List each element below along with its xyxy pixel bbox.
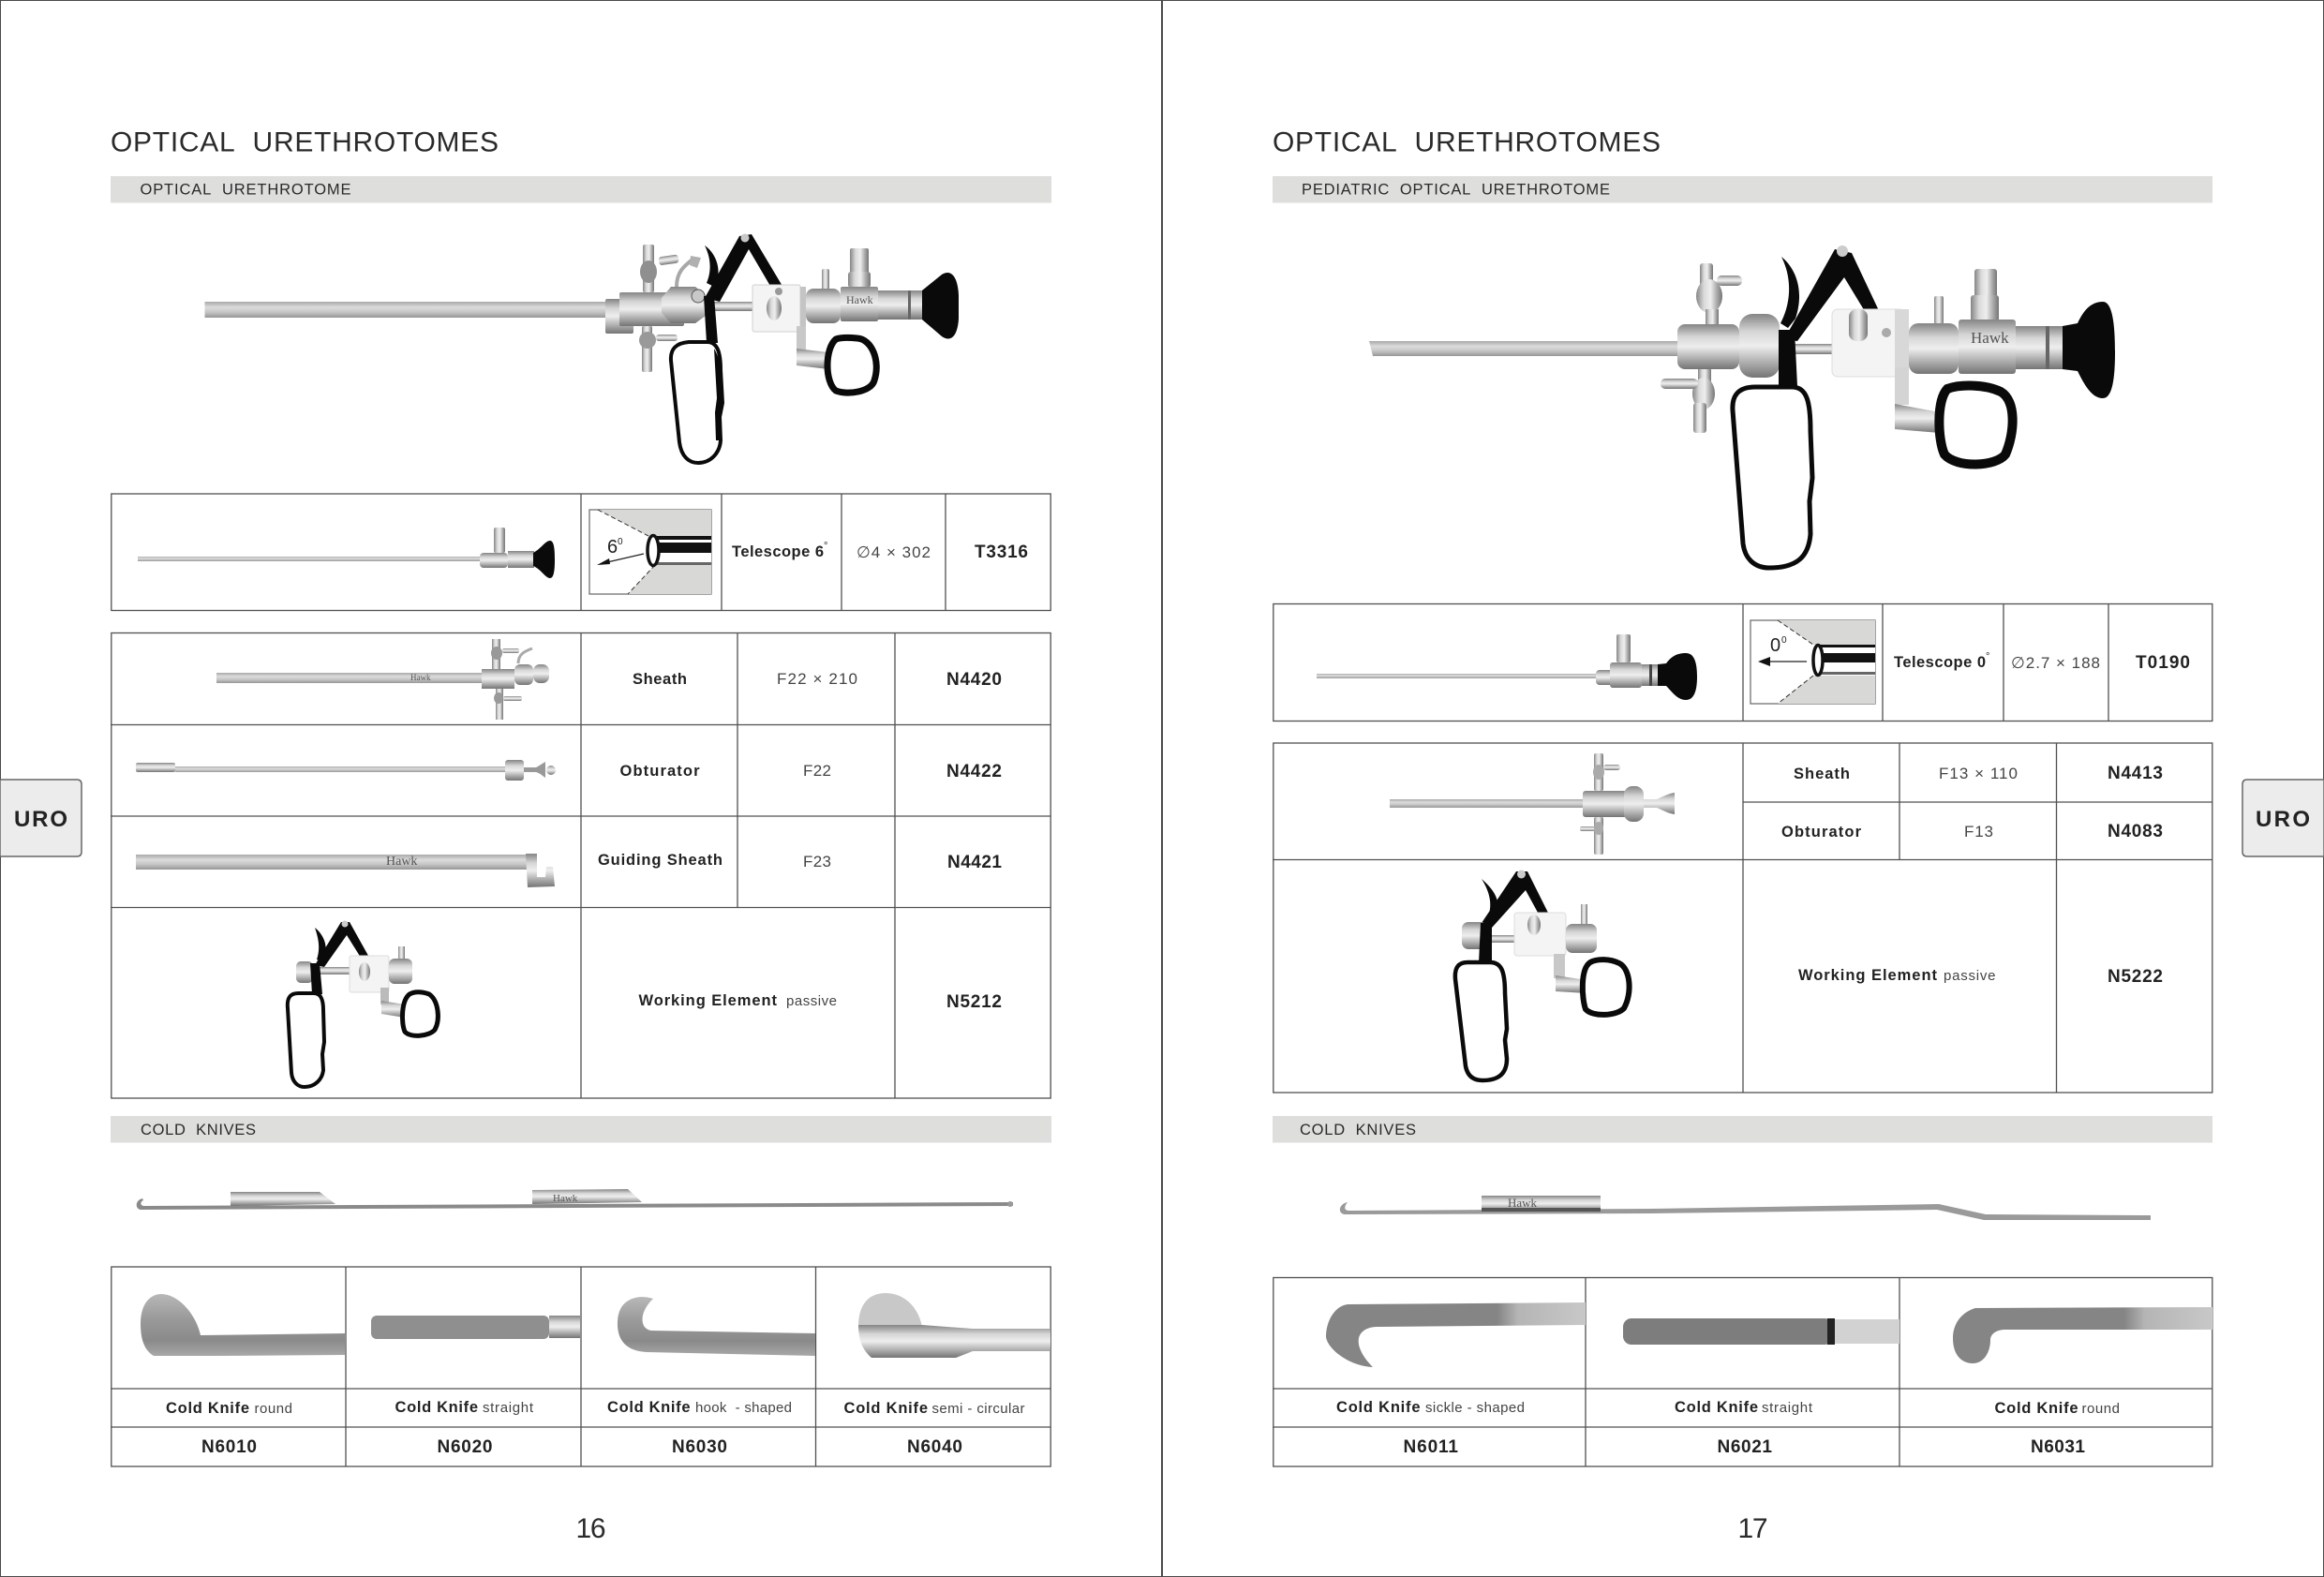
code: N6031: N6031 — [2031, 1437, 2085, 1457]
product image: sheath — [216, 639, 549, 720]
page number 16: 16 — [575, 1513, 605, 1544]
tab: URO right: URO — [2256, 807, 2310, 832]
label: Cold Knife straight: straight — [1762, 1400, 1813, 1416]
label: Cold Knife straight — [395, 1399, 534, 1416]
table: cold knives — [111, 1267, 1050, 1466]
table: sheath, obturator, guiding sheath, working element — [111, 632, 1050, 1098]
section bar: cold knives: COLD KNIVES — [1300, 1122, 1416, 1138]
title: OPTICAL URETHROTOMES — [1273, 127, 1661, 157]
label: Cold Knife round: round — [255, 1401, 292, 1417]
section bar: cold knives: COLD KNIVES — [141, 1122, 256, 1138]
diagram: 0 degree view — [1750, 620, 1875, 704]
label: Cold Knife sickle-shaped — [1336, 1399, 1525, 1416]
knife: hook-shaped — [618, 1297, 815, 1356]
code: N5222: N5222 — [2108, 967, 2163, 987]
diagram: 6 degree view — [589, 510, 711, 594]
size: F13: F13 — [1964, 823, 1993, 841]
product image: cold knife — [1340, 1196, 2151, 1220]
label: Cold Knife straight: straight — [483, 1400, 534, 1416]
label: Working Element passive: passive — [786, 993, 837, 1009]
table: telescope — [112, 494, 1050, 611]
size: F22: F22 — [803, 762, 831, 780]
label: Cold Knife round — [166, 1400, 292, 1417]
product image: cold knife — [137, 1189, 1013, 1210]
cell: Telescope 6: ° — [824, 541, 827, 552]
product image: sheath and obturator — [1390, 753, 1675, 855]
code: N4422: N4422 — [946, 762, 1002, 781]
section bar: cold knives — [111, 1116, 1051, 1143]
label: Obturator: Obturator — [620, 763, 700, 780]
code: N6040: N6040 — [907, 1437, 962, 1457]
knife: round — [141, 1294, 345, 1356]
label: Cold Knife straight — [1675, 1399, 1813, 1416]
tab: URO left — [0, 780, 82, 856]
product image: cold knife: Hawk — [553, 1193, 578, 1204]
tab: URO right — [2242, 780, 2324, 856]
cell: Telescope 0: ° — [1986, 651, 1989, 662]
code: N5212: N5212 — [946, 992, 1002, 1012]
section bar: pediatric optical urethrotome — [1273, 176, 2212, 202]
code: N6011: N6011 — [1404, 1437, 1458, 1457]
product image: obturator — [136, 760, 556, 781]
product image: assembled pediatric urethrotome: Hawk — [1971, 329, 2009, 347]
code: N4083: N4083 — [2108, 822, 2163, 841]
product image: working element — [1455, 870, 1630, 1080]
label: Sheath: Sheath — [633, 671, 687, 688]
knife: semi-circular — [858, 1293, 1050, 1358]
knife: straight — [371, 1316, 580, 1339]
code: N6010: N6010 — [201, 1437, 257, 1457]
product image: assembled optical urethrotome — [204, 234, 959, 463]
size: F13 x 110: F13 × 110 — [1939, 765, 2018, 782]
label: Cold Knife sickle-shaped: Cold Knife — [1336, 1399, 1421, 1416]
label: Cold Knife hook-shaped: hook - shaped — [695, 1400, 792, 1416]
label: Cold Knife hook-shaped — [607, 1399, 792, 1416]
section bar: optical urethrotome: OPTICAL URETHROTOME — [141, 182, 350, 199]
label: Cold Knife semi-circular: Cold Knife — [843, 1400, 928, 1417]
knife: straight — [1623, 1318, 1899, 1345]
label: Working Element passive — [639, 992, 837, 1009]
label: Obturator: Obturator — [1781, 824, 1862, 841]
product image: sheath: Hawk — [410, 673, 431, 682]
diagram: 6 degree view: 6 — [607, 537, 618, 558]
label: Cold Knife round — [1994, 1400, 2120, 1417]
code: N4413: N4413 — [2108, 764, 2163, 783]
label: Cold Knife semi-circular: semi - circular — [931, 1401, 1025, 1417]
cell: code T0190: T0190 — [2136, 653, 2190, 673]
cell: code T3316: T3316 — [975, 543, 1028, 562]
product image: assembled pediatric urethrotome — [1369, 245, 2115, 568]
cell: dimensions: ∅2.7 × 188 — [2011, 654, 2100, 672]
page number 17: 17 — [1737, 1513, 1767, 1544]
panel: page 17 — [1273, 127, 2324, 1544]
code: N6021: N6021 — [1717, 1437, 1772, 1457]
label: Cold Knife straight: Cold Knife — [1675, 1399, 1758, 1416]
label: Working Element passive: passive — [1944, 968, 1996, 984]
code: N4421: N4421 — [947, 853, 1002, 872]
diagram: 0 degree view: 0 — [1770, 635, 1780, 656]
code: N6030: N6030 — [672, 1437, 727, 1457]
title: OPTICAL URETHROTOMES — [111, 127, 499, 157]
knife: sickle-shaped — [1326, 1302, 1586, 1367]
label: Working Element passive: Working Element — [639, 992, 778, 1009]
label: Sheath: Sheath — [1794, 766, 1850, 782]
product image: telescope — [1317, 634, 1697, 700]
size: F23: F23 — [803, 853, 831, 870]
label: Working Element passive: Working Element — [1798, 967, 1938, 984]
cell: Telescope 6: Telescope 6 — [732, 543, 824, 560]
tab: URO left: URO — [14, 807, 67, 832]
product image: cold knife: Hawk — [1508, 1196, 1538, 1210]
section bar: optical urethrotome — [111, 176, 1051, 202]
label: Guiding Sheath: Guiding Sheath — [598, 852, 723, 869]
panel: page 16 — [0, 127, 1051, 1544]
label: Cold Knife round: Cold Knife — [1994, 1400, 2078, 1417]
table: cold knives — [1273, 1277, 2212, 1466]
cell: Telescope 0: Telescope 0 — [1894, 654, 1986, 671]
label: Cold Knife sickle-shaped: sickle - shaped — [1425, 1400, 1525, 1416]
label: Cold Knife round: Cold Knife — [166, 1400, 249, 1417]
product image: telescope — [138, 528, 555, 578]
section bar: pediatric optical urethrotome: PEDIATRIC OPTICAL URETHROTOME — [1302, 182, 1610, 199]
code: N6020: N6020 — [437, 1437, 493, 1457]
label: Cold Knife round: round — [2082, 1401, 2120, 1417]
table: sheath, obturator, working element — [1273, 743, 2212, 1093]
diagram: 6 degree view: 0 — [618, 537, 623, 547]
product image: guiding sheath — [136, 854, 555, 887]
table: telescope — [1274, 603, 2212, 722]
diagram: 0 degree view: 0 — [1781, 635, 1787, 646]
product image: assembled optical urethrotome: Hawk — [846, 293, 873, 306]
label: Cold Knife semi-circular — [843, 1400, 1025, 1417]
label: Cold Knife straight: Cold Knife — [395, 1399, 478, 1416]
knife: round — [1953, 1307, 2212, 1363]
code: N4420: N4420 — [946, 670, 1002, 690]
cell: dimensions: ∅4 × 302 — [857, 543, 931, 561]
section bar: cold knives — [1273, 1116, 2212, 1143]
size: F22 x 210: F22 × 210 — [777, 670, 857, 688]
label: Cold Knife hook-shaped: Cold Knife — [607, 1399, 690, 1416]
product image: guiding sheath: Hawk — [386, 855, 417, 869]
product image: working element — [288, 920, 438, 1087]
